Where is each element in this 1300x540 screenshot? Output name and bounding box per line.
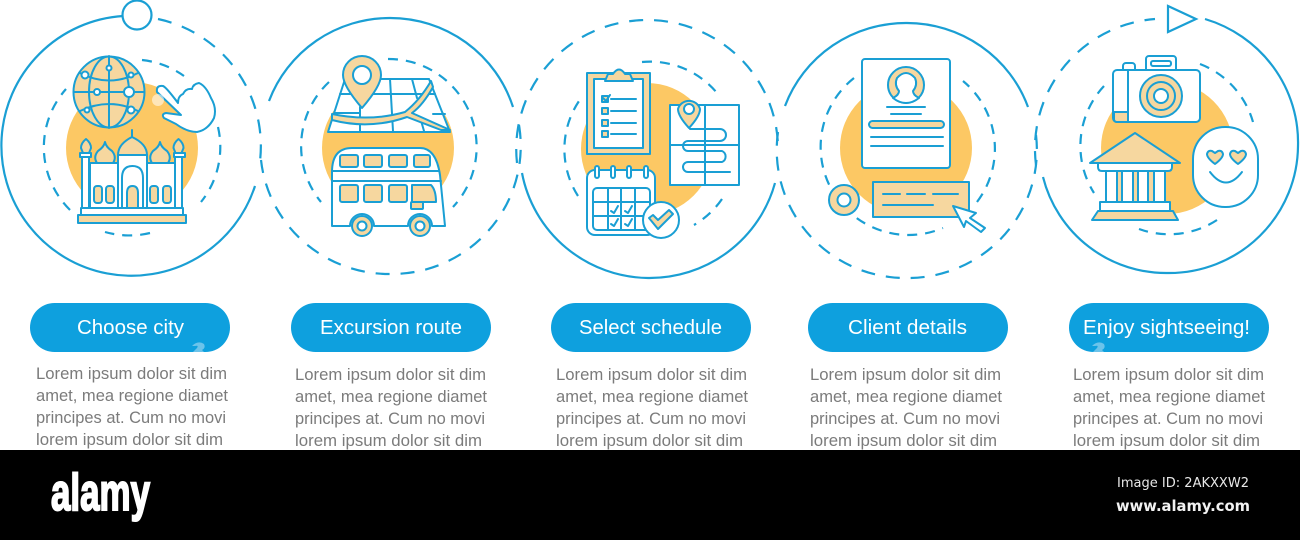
text block: step 3 description: principes at. Cum no movi [556,410,746,428]
inner dashed ring [301,59,477,207]
alamy logo: alamy [51,464,150,522]
icon: cursor arrow [953,206,985,232]
icon: checklist clipboard [587,70,650,154]
inner dashed ring [44,60,220,235]
icon: map pin [343,56,381,108]
heading pill: Choose city: Choose city [77,317,184,339]
icon: camera [1113,56,1200,122]
text block: step 5 description: principes at. Cum no movi [1073,410,1263,428]
heading pill: Client details: Client details [848,317,967,339]
icon: globe [74,56,144,128]
text block: step 2 description: lorem ipsum dolor sit dim [295,432,482,450]
text block: step 5 description: amet, mea regione diamet [1073,388,1265,406]
yellow disc [840,82,972,214]
panel: client details illustration [777,23,1037,278]
text block: step 1 description [36,365,228,449]
text block: step 3 description: lorem ipsum dolor sit dim [556,432,743,450]
icon: pointing hand [152,83,215,132]
icon: radio option [829,185,859,215]
text block: step 2 description: principes at. Cum no movi [295,410,485,428]
outer ring step 3 [516,20,778,278]
heading pill: Select schedule: Select schedule [579,317,722,339]
text block: step 1 description: amet, mea regione diamet [36,387,228,405]
text block: step 3 description [556,366,748,450]
inner dashed ring [821,78,995,235]
inner dashed ring [1080,64,1253,234]
icon: check badge [643,202,679,238]
panel: select schedule illustration [516,20,778,278]
image id: Image ID: 2AKXXW2 [1117,475,1249,491]
footer bar [0,450,1300,540]
start marker circle [122,0,152,30]
text block: step 2 description: amet, mea regione diamet [295,388,487,406]
text block: step 1 description: principes at. Cum no movi [36,409,226,427]
text block: step 2 description: Lorem ipsum dolor sit dim [295,366,486,384]
text block: step 3 description: Lorem ipsum dolor sit dim [556,366,747,384]
heading pill: Excursion route: Excursion route [320,317,462,339]
text block: step 4 description: lorem ipsum dolor sit dim [810,432,997,450]
text block: step 4 description: principes at. Cum no movi [810,410,1000,428]
heading pill: Excursion route [291,303,491,352]
end marker triangle [1168,6,1196,32]
icon: museum building [1090,133,1180,220]
text block: step 1 description: lorem ipsum dolor sit dim [36,431,223,449]
icon: calendar [587,166,655,235]
yellow disc [322,82,454,214]
outer ring step 1 [1,16,261,276]
panel: excursion route illustration [261,18,521,274]
icon: client document [862,59,950,168]
text block: step 4 description: amet, mea regione diamet [810,388,1002,406]
icon: mosque [78,130,186,223]
heading pill: Enjoy sightseeing [1069,303,1269,352]
heading pill: Client details [808,303,1008,352]
icon: form card [873,182,969,217]
panel: choose city illustration [1,0,261,276]
outer ring step 5 [1035,19,1298,273]
icon: double decker bus [332,148,445,236]
text block: step 5 description [1073,366,1265,450]
text block: step 1 description: Lorem ipsum dolor sit dim [36,365,227,383]
heading pill: Enjoy sightseeing: Enjoy sightseeing! [1083,317,1250,339]
yellow disc [1101,82,1233,214]
icon: city map [328,79,450,132]
outer ring step 4 [777,23,1037,278]
text block: step 2 description [295,366,487,450]
yellow disc [66,82,198,214]
text block: step 5 description: lorem ipsum dolor sit dim [1073,432,1260,450]
text block: step 4 description [810,366,1002,450]
text block: step 5 description: Lorem ipsum dolor sit dim [1073,366,1264,384]
website address: www.alamy.com [1116,497,1250,515]
text block: step 3 description: amet, mea regione diamet [556,388,748,406]
icon: route map [670,101,739,185]
text block: step 4 description: Lorem ipsum dolor sit dim [810,366,1001,384]
panel: enjoy sightseeing illustration [1035,6,1298,273]
icon: smiling face with heart eyes [1193,127,1258,207]
yellow disc [581,83,713,215]
heading pill: Select schedule [551,303,751,352]
heading pill: Choose city [30,303,230,352]
inner dashed ring [564,62,722,225]
outer ring step 2 [261,18,521,274]
